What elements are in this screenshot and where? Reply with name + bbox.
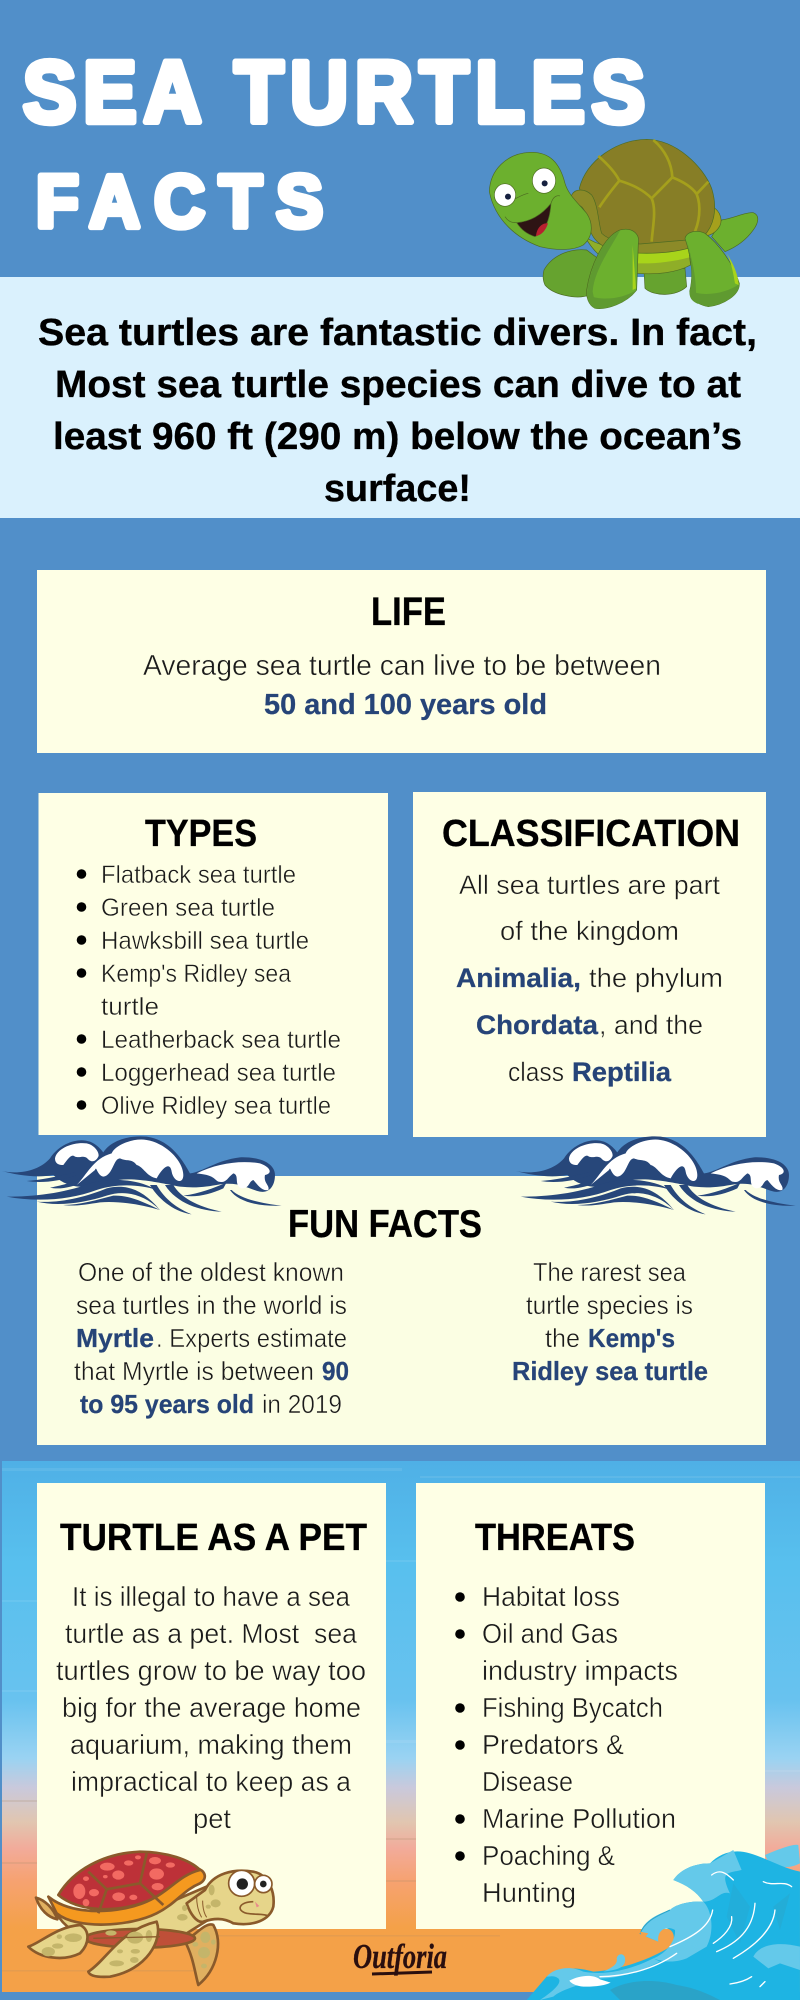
list: sea turtle types: Hawksbill sea turtle [101,927,309,955]
list: sea turtle types: Leatherback sea turtle [101,1026,341,1054]
list: sea turtle types: Green sea turtle [101,894,275,922]
text: rarest turtle fact: the [545,1323,580,1353]
text: classification sentence [456,870,723,1087]
text: classification sentence: , and the [599,1010,703,1040]
text: oldest turtle fact: that Myrtle is between [74,1356,314,1386]
heading: types: TYPES [145,813,257,855]
text: rarest turtle fact: turtle species is [526,1290,693,1320]
icon: left wave [2,1136,282,1214]
heading: fun facts: FUN FACTS [288,1203,482,1246]
icon: green cartoon turtle [489,139,758,309]
heading: life: LIFE [371,590,446,634]
title: FACTS [36,161,323,243]
list: sea turtle types: Loggerhead sea turtle [101,1059,336,1087]
text: pet explanation: aquarium, making them [70,1729,352,1760]
panel: intro fact band: surface! [324,468,471,510]
list: threats [455,1581,678,1908]
panel: life [37,570,766,753]
heading: turtle as a pet: TURTLE AS A PET [60,1517,367,1559]
list: sea turtle types: Kemp's Ridley sea [101,960,291,988]
panel: turtle as a pet [37,1483,386,1929]
list: threats: Oil and Gas [482,1618,618,1649]
text: oldest turtle fact: . Experts estimate [156,1323,347,1353]
heading: threats: THREATS [475,1517,635,1559]
panel: intro fact band: Most sea turtle species can dive to at [55,364,741,406]
text: oldest turtle fact [74,1257,349,1419]
list: threats: Predators & [482,1729,624,1760]
text: classification sentence: of the kingdom [500,916,679,946]
logo: Outforia: Outforia [353,1937,447,1976]
list: threats: Disease [482,1766,573,1797]
text: lifespan sentence [143,650,661,721]
icon: right wave [516,1136,796,1214]
text: oldest turtle fact: 90 [322,1356,349,1386]
text: classification sentence: class [508,1057,564,1087]
text: lifespan sentence: Average sea turtle can live to be between [143,650,661,682]
text: rarest turtle fact [512,1257,708,1386]
text: classification sentence: All sea turtles are part [459,870,720,900]
icon: large blue wave [527,1845,800,2000]
text: rarest turtle fact: Kemp's [588,1323,675,1353]
list: threats: Marine Pollution [482,1803,676,1834]
text: pet explanation: turtles grow to be way too [56,1655,366,1686]
heading: classification: CLASSIFICATION [442,813,740,855]
panel: threats [416,1483,765,1929]
text: oldest turtle fact: in 2019 [262,1389,342,1419]
list: threats: Poaching & [482,1840,615,1871]
text: pet explanation: impractical to keep as a [71,1766,351,1797]
panel: intro fact band: Sea turtles are fantastic divers. In fact, [38,312,757,354]
list: threats: Fishing Bycatch [482,1692,663,1723]
text: pet explanation: big for the average home [62,1692,361,1723]
text: rarest turtle fact: The rarest sea [533,1257,686,1287]
list: threats: Habitat loss [482,1581,620,1612]
icon: red-shelled sea turtle [28,1852,274,1985]
text: classification sentence: Reptilia [572,1057,672,1087]
text: classification sentence: Animalia, [456,963,581,993]
panel: ocean and sand backdrop [2,1461,800,1992]
text: oldest turtle fact: to 95 years old [80,1389,254,1419]
text: pet explanation: turtle as a pet. Most sea [65,1618,357,1649]
panel: types [38,793,388,1135]
text: pet explanation [56,1581,366,1834]
text: pet explanation: pet [193,1803,231,1834]
list: sea turtle types: Flatback sea turtle [101,861,296,889]
panel: fun facts [37,1176,766,1445]
text: rarest turtle fact: Ridley sea turtle [512,1356,708,1386]
list: threats: Hunting [482,1877,576,1908]
text: classification sentence: the phylum [589,963,723,993]
list: sea turtle types: Olive Ridley sea turtle [101,1092,331,1120]
text: oldest turtle fact: Myrtle [76,1323,154,1353]
text: pet explanation: It is illegal to have a sea [72,1581,350,1612]
text: oldest turtle fact: One of the oldest known [78,1257,344,1287]
panel: classification [413,792,766,1137]
text: classification sentence: Chordata [476,1010,599,1040]
list: threats: industry impacts [482,1655,678,1686]
list: sea turtle types: turtle [101,993,159,1021]
panel: intro fact band [0,277,800,518]
panel: intro fact band: least 960 ft (290 m) below the ocean’s [53,416,742,458]
text: lifespan sentence: 50 and 100 years old [264,689,547,721]
title [23,43,645,243]
text: oldest turtle fact: sea turtles in the world is [76,1290,347,1320]
title: SEA TURTLES [23,43,645,141]
list: sea turtle types [77,861,341,1120]
